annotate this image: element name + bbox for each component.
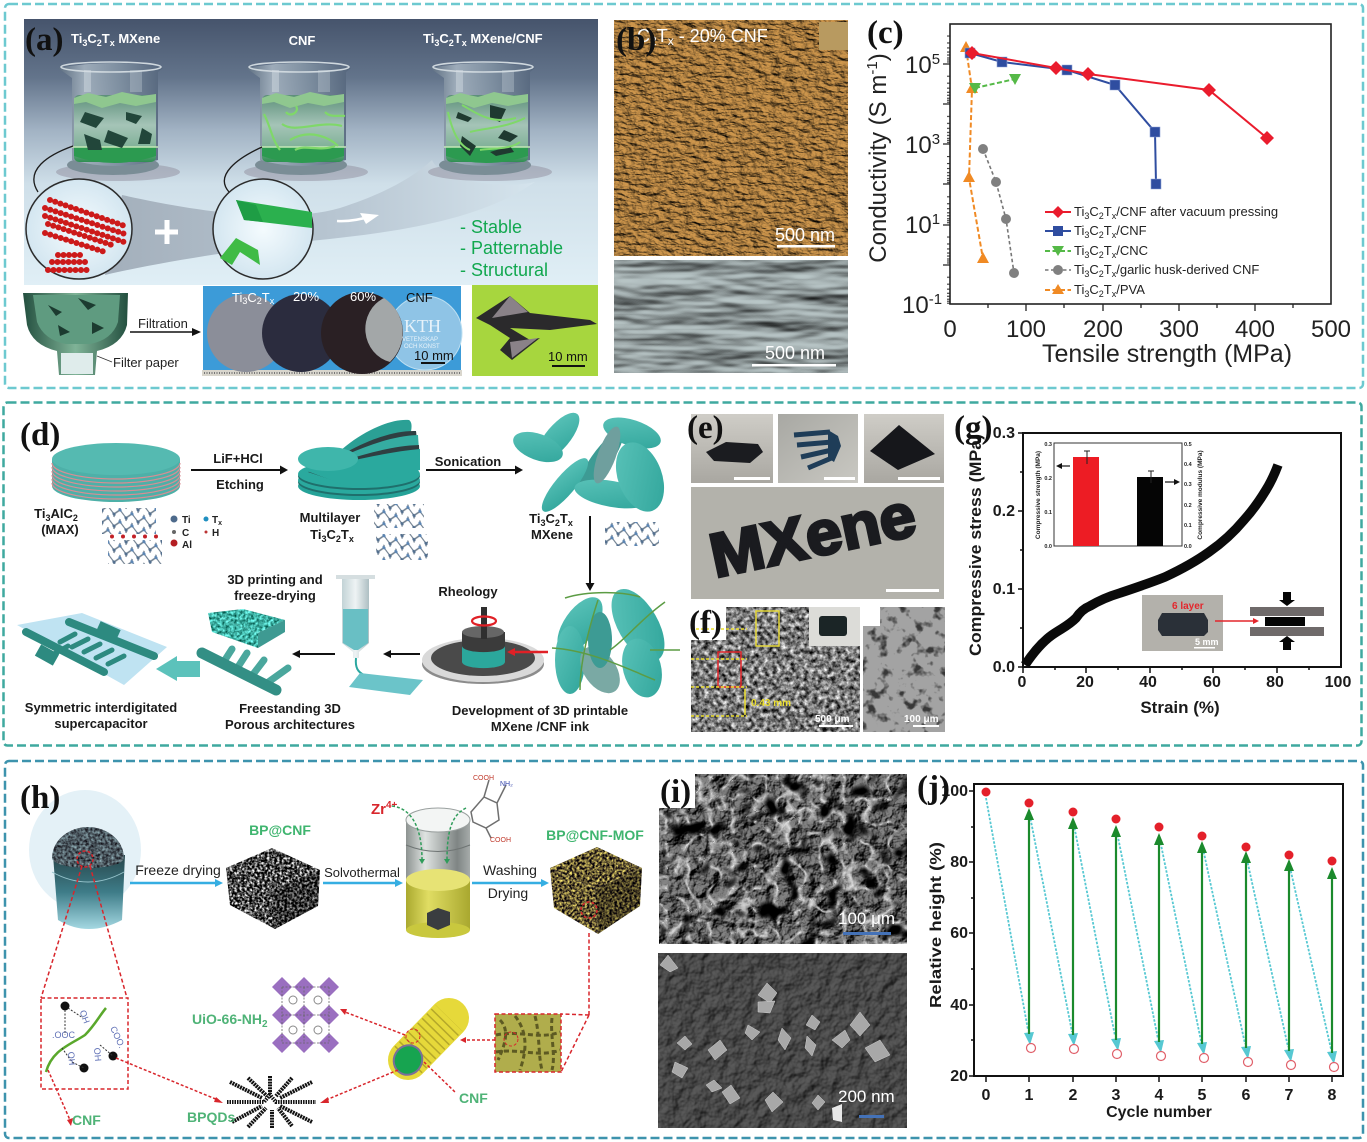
3D printing caption [227, 572, 323, 603]
label i: (i) [660, 774, 691, 810]
MAX and multilayer captions [34, 506, 573, 544]
series: blue CNF [965, 48, 1161, 189]
micrograph (i): MOF crystals: 200 nm [838, 1087, 895, 1106]
photo: folded film: 10 mm [548, 349, 588, 364]
inset bar chart: 0.4 [1184, 462, 1193, 468]
legend: /garlic husk-derived CNF [1116, 262, 1259, 277]
washing drying arrow: Drying [488, 885, 528, 901]
beaker titles: MXene/CNF [467, 31, 543, 46]
stress curve [1025, 465, 1278, 665]
MOF crystal structure [272, 977, 339, 1053]
beaker: CNF [244, 62, 368, 181]
inset photo: 6 layer sample: 6 layer [1172, 601, 1204, 612]
beaker titles: x [110, 38, 115, 48]
micrograph (i): porous network: 100 μm [838, 909, 895, 928]
etching arrow: LiF+HCl [213, 451, 263, 466]
legend: Ti [1074, 282, 1084, 297]
micrograph (b): AFM image: C [637, 26, 650, 46]
UiO label: UiO-66-NH [192, 1011, 262, 1027]
y tick labels: 3 [932, 131, 940, 148]
photo: film series: 60% [350, 289, 376, 304]
Zr ion label and green arrows: 4+ [386, 800, 398, 811]
tick labels: 20 [950, 1068, 968, 1085]
legend: C [1089, 223, 1099, 238]
micrograph (b): AFM image: x [668, 34, 674, 48]
sonication arrow [426, 454, 523, 474]
reaction vessel [406, 808, 470, 938]
beaker titles: 2 [97, 38, 102, 48]
green recovery arrows [1024, 808, 1337, 1053]
photo: film series [202, 286, 462, 376]
legend: 3 [1084, 269, 1089, 279]
tick labels: 2 [1069, 1087, 1078, 1104]
tick labels: 100 [941, 783, 968, 800]
inset bar chart: 0.0 [1044, 544, 1052, 550]
legend: 2 [1099, 269, 1104, 279]
label g: (g) [954, 410, 992, 446]
micrograph (b): AFM image: 500 nm [775, 225, 835, 245]
MAX and multilayer captions: 3 [540, 518, 545, 528]
BP@CNF cube: BP@CNF [249, 822, 311, 838]
tick labels: 1 [1025, 1087, 1034, 1104]
interdigitated supercapacitor [17, 613, 167, 685]
MAX and multilayer captions: Ti [310, 527, 321, 542]
micrograph (b): AFM image: - 20% CNF [674, 26, 768, 46]
photos (e): printed objects: MXene [704, 481, 922, 591]
down arrow [586, 516, 594, 591]
legend: C [1089, 262, 1099, 277]
red dashed zoom lines [41, 851, 128, 1089]
legend: x [1112, 250, 1117, 260]
photo: film series: 10 mm [414, 348, 454, 363]
linker molecule: NH₂ [500, 781, 513, 788]
beaker titles: CNF [289, 33, 315, 48]
Zr ion label and green arrows [371, 800, 466, 864]
3D printing caption: freeze-drying [234, 588, 316, 603]
BP@CNF cube [226, 822, 320, 929]
tick labels: 0.2 [993, 503, 1015, 520]
properties list: - Stable [460, 217, 522, 237]
MAX and multilayer captions: 2 [73, 513, 78, 523]
legend: T [1104, 223, 1112, 238]
tick labels: 100 [1325, 674, 1351, 691]
beaker titles: 3 [82, 38, 87, 48]
MAX and multilayer captions: (MAX) [41, 522, 79, 537]
axis titles: Cycle number [1106, 1104, 1212, 1121]
bottom captions: MXene /CNF ink [491, 719, 590, 734]
legend: C [1089, 243, 1099, 258]
green captions [72, 1090, 488, 1128]
x tick labels: 500 [1311, 316, 1351, 343]
filtration label and arrow [97, 316, 201, 370]
chart (g): compressive stress-strain [966, 425, 1351, 717]
properties list: - Patternable [460, 238, 563, 258]
beaker titles: 3 [434, 38, 439, 48]
legend: T [1104, 282, 1112, 297]
linker molecule: COOH [473, 775, 494, 782]
atom legend: C [182, 528, 189, 539]
micrograph (b): AFM image: 2 [650, 34, 657, 48]
legend: Ti [1074, 262, 1084, 277]
tick labels: 80 [1266, 674, 1284, 691]
red filled points [982, 788, 1336, 866]
properties list: - Structural [460, 260, 548, 280]
photo: film series: KTH [404, 316, 441, 336]
MAX and multilayer captions: Multilayer [300, 510, 360, 525]
y tick labels: 1 [932, 211, 940, 228]
atom legend: T [212, 515, 218, 526]
label h: (h) [20, 780, 60, 816]
micrograph (b): layered SEM cross section [614, 260, 848, 373]
big teal arrow [156, 656, 200, 681]
swoosh band [105, 160, 535, 275]
legend: 3 [1084, 211, 1089, 221]
micrograph (f): printed lattice SEM [689, 605, 860, 732]
legend: 2 [1099, 250, 1104, 260]
tick labels: 20 [1076, 674, 1094, 691]
CNF molecular detail: OH [92, 1047, 103, 1062]
beaker titles: x [462, 38, 467, 48]
legend: x [1112, 211, 1117, 221]
legend: Ti [1074, 223, 1084, 238]
UiO label: 2 [262, 1019, 268, 1030]
plus sign [155, 220, 178, 244]
legend: T [1104, 204, 1112, 219]
inset bar chart: 0.1 [1044, 510, 1052, 516]
tick labels: 0.1 [993, 581, 1015, 598]
photo: film series: 20% [293, 289, 319, 304]
tick labels: 40 [950, 997, 968, 1014]
tick labels: 0.0 [993, 659, 1015, 676]
properties list [460, 217, 563, 280]
tick labels: 80 [950, 854, 968, 871]
micrograph (i): MOF crystals [658, 953, 907, 1128]
photo: film series: CNF [406, 290, 433, 305]
legend: 3 [1084, 250, 1089, 260]
photo: film series: OCH KONST [404, 344, 440, 350]
schematic (h): aerogel synthesis [29, 775, 644, 1128]
CNF molecular detail: .OOC [52, 1030, 76, 1040]
circle: MXene crystal zoom [26, 179, 132, 279]
y tick labels: 5 [932, 51, 940, 68]
bottom captions: Symmetric interdigitated [25, 700, 177, 715]
filtration label and arrow: Filter paper [113, 355, 179, 370]
solvothermal arrow [323, 865, 403, 887]
MAX and multilayer captions: T [341, 527, 349, 542]
photo: film series: 3 [242, 296, 247, 306]
tick labels: 3 [1112, 1087, 1121, 1104]
legend: T [1104, 243, 1112, 258]
x tick labels: 300 [1159, 316, 1199, 343]
washing drying arrow [472, 862, 549, 901]
syringe and printed strip [336, 575, 423, 695]
MAX and multilayer captions: x [349, 534, 354, 544]
beaker: MXene [56, 62, 180, 181]
y tick labels: -1 [929, 291, 942, 308]
beaker: MXene/CNF [428, 62, 552, 181]
micrograph (b): layered SEM cross section: 500 nm [765, 343, 825, 363]
washing drying arrow: Washing [483, 862, 537, 878]
legend: C [1089, 204, 1099, 219]
series: green CNC [969, 74, 1021, 94]
legend: /PVA [1116, 282, 1145, 297]
MAX and multilayer captions: AlC [50, 506, 73, 521]
atom legend: Ti [182, 515, 191, 526]
porous block [208, 609, 285, 648]
solvothermal arrow: Solvothermal [324, 865, 400, 880]
legend: C [1089, 282, 1099, 297]
tick labels: 5 [1198, 1087, 1207, 1104]
CNF molecular detail: HO [78, 1009, 92, 1025]
micrograph (b): AFM image: T [657, 26, 668, 46]
legend: 2 [1099, 230, 1104, 240]
pore close-up square [495, 933, 589, 1072]
hydrogel beaker [29, 790, 141, 929]
photo: film series: 2 [257, 296, 262, 306]
inset bar chart: 0.1 [1184, 523, 1192, 529]
CNF molecular detail: OH [66, 1051, 77, 1066]
photo: film series: VETENSKAP [402, 337, 438, 343]
inset bar chart: 0.2 [1184, 503, 1192, 509]
tick labels: 6 [1242, 1087, 1251, 1104]
MAX and multilayer captions: Ti [34, 506, 45, 521]
filtration funnel [23, 293, 128, 375]
legend: x [1112, 269, 1117, 279]
x axis title: Tensile strength (MPa) [1042, 340, 1292, 368]
bottom captions: Freestanding 3D [239, 701, 341, 716]
legend: Ti [1074, 204, 1084, 219]
inset bar chart: Compressive strength (MPa) [1035, 451, 1042, 539]
beaker titles: C [87, 31, 97, 46]
inset bar chart: 0.3 [1184, 482, 1192, 488]
legend: Ti [1074, 243, 1084, 258]
MAX and multilayer captions: 2 [336, 534, 341, 544]
series: red vacuum pressed [965, 46, 1274, 145]
bottom captions: Development of 3D printable [452, 703, 628, 718]
linker molecule [471, 775, 513, 844]
micrograph (f): pore close-up [862, 606, 945, 732]
MAX disc [52, 443, 180, 502]
freeze drying arrow [130, 862, 223, 887]
micrograph (i): porous network [659, 774, 907, 944]
tick labels: 4 [1155, 1087, 1164, 1104]
label e: (e) [687, 410, 724, 446]
tick labels: 7 [1285, 1087, 1294, 1104]
legend: /CNC [1116, 243, 1148, 258]
MAX and multilayer captions: 3 [321, 534, 326, 544]
tick labels [941, 783, 1337, 1104]
beaker titles: MXene [115, 31, 160, 46]
legend: /CNF after vacuum pressing [1116, 204, 1278, 219]
label b: (b) [616, 22, 656, 58]
multilayer stack [298, 420, 420, 500]
CNF molecular detail: COO. [108, 1025, 127, 1050]
inset bar chart: 0.0 [1184, 544, 1192, 550]
bottom captions: Porous architectures [225, 717, 355, 732]
micrograph (f): printed lattice SEM: 0.43 mm [751, 698, 791, 709]
circle: CNF fibre zoom [213, 179, 313, 279]
tick labels: 0.3 [993, 425, 1015, 442]
BP@CNF-MOF cube [546, 827, 644, 934]
etching arrow [191, 451, 288, 492]
label j: (j) [917, 770, 950, 806]
MAX and multilayer captions: C [326, 527, 336, 542]
bottom captions [25, 700, 628, 734]
coated fibre [388, 1018, 449, 1080]
y tick labels: 10 [905, 212, 932, 239]
photo: film series: Ti [232, 290, 242, 305]
tick labels: 0 [982, 1087, 991, 1104]
schematic (d): ink synthesis and printing [17, 406, 680, 734]
inset photo: 6 layer sample [1142, 595, 1223, 651]
legend: x [1112, 230, 1117, 240]
red input arrow [507, 648, 548, 656]
micrograph (f): printed lattice SEM: 500 μm [815, 714, 850, 725]
BPQDs burst [227, 1076, 316, 1128]
BP@CNF-MOF cube: BP@CNF-MOF [546, 827, 644, 843]
axis titles: Strain (%) [1140, 698, 1220, 717]
CNF molecular detail [46, 1002, 127, 1072]
tick labels [993, 425, 1351, 691]
label a: (a) [25, 22, 63, 58]
photo: film series: C [247, 290, 257, 305]
inset bar chart: 0.3 [1044, 442, 1052, 448]
beaker titles: T [102, 31, 110, 46]
legend: x [1112, 289, 1117, 299]
callout curves [34, 146, 262, 192]
beaker titles: Ti [71, 31, 82, 46]
green captions: BPQDs [187, 1109, 235, 1125]
MAX and multilayer captions: 3 [45, 513, 50, 523]
chart (g): compressive stress-strain: Compressive stress (MPa) [966, 434, 985, 656]
freestanding comb [202, 649, 288, 690]
y axis title: -1 [864, 61, 881, 75]
photos (e): printed objects [691, 414, 944, 599]
x tick labels: 200 [1083, 316, 1123, 343]
chart (c): conductivity vs tensile strength [864, 24, 1351, 368]
red dashed pointers [48, 1012, 495, 1120]
atom legend: x [218, 520, 222, 527]
tick labels: 8 [1328, 1087, 1337, 1104]
x tick labels [943, 316, 1351, 343]
photo: film series: x [270, 296, 275, 306]
ink flakes with CNF [549, 580, 680, 702]
legend: 3 [1084, 230, 1089, 240]
freeze drying arrow: Freeze drying [135, 862, 221, 878]
MAX and multilayer captions: C [545, 511, 555, 526]
inset bar chart: Compressive modulus (MPa) [1197, 450, 1204, 540]
green captions: CNF [72, 1112, 101, 1128]
red arrow heads [67, 1009, 466, 1126]
legend: 2 [1099, 289, 1104, 299]
series: grey garlic husk CNF [978, 144, 1019, 278]
rheometer: Rheology [438, 584, 498, 599]
3D printing caption: 3D printing and [227, 572, 323, 587]
dispersed flakes [509, 406, 673, 518]
label c: (c) [867, 15, 904, 51]
legend [1045, 204, 1278, 299]
micrograph (b): AFM image [614, 20, 848, 256]
series: orange PVA [960, 41, 989, 263]
tick labels: 60 [950, 925, 968, 942]
y tick labels: 10 [902, 292, 929, 319]
linker molecule: COOH [490, 837, 511, 844]
rheometer [422, 584, 544, 684]
beaker titles: Ti [423, 31, 434, 46]
legend: 3 [1084, 289, 1089, 299]
panel: BP@CNF-MOF aerogel (h-j) [5, 761, 1363, 1138]
MAX and multilayer captions: 2 [555, 518, 560, 528]
chart (j): relative height cycling: Relative height (%) [928, 842, 945, 1008]
bottom captions: supercapacitor [54, 716, 148, 731]
y axis title: Conductivity (S m [865, 75, 892, 263]
label f: (f) [689, 605, 722, 641]
white arrow [337, 213, 379, 224]
MAX and multilayer captions: Ti [529, 511, 540, 526]
photo: folded film [472, 285, 598, 376]
legend: /CNF [1116, 223, 1147, 238]
filtration label and arrow: Filtration [138, 316, 188, 331]
y axis title: ) [865, 53, 892, 61]
MAX and multilayer captions: MXene [531, 527, 573, 542]
green captions: CNF [459, 1090, 488, 1106]
atom legend: Al [182, 540, 192, 551]
atom legend: H [212, 528, 219, 539]
panel: 3D printed MXene ink (d-g) [4, 402, 1362, 746]
beaker titles: T [454, 31, 462, 46]
sonication arrow: Sonication [435, 454, 501, 469]
x tick labels: 400 [1235, 316, 1275, 343]
illustration (a): beakers and composite mixing [24, 19, 598, 285]
etching arrow: Etching [216, 477, 264, 492]
x tick labels: 100 [1006, 316, 1046, 343]
panel: MXene/CNF films (a-c) [5, 4, 1363, 388]
tick labels: 40 [1139, 674, 1157, 691]
beaker titles: 2 [449, 38, 454, 48]
y tick labels: 10 [905, 52, 932, 79]
photo: film series: T [262, 290, 270, 305]
cyan compression arrows [986, 798, 1337, 1064]
micrograph (f): pore close-up: 100 μm [904, 714, 939, 725]
tick labels: 0 [1018, 674, 1027, 691]
process arrows [292, 650, 420, 658]
label d: (d) [20, 417, 60, 453]
Zr ion label and green arrows: Zr [371, 801, 386, 818]
inset bar chart [1035, 442, 1204, 550]
legend: 2 [1099, 211, 1104, 221]
atom legend [170, 515, 222, 551]
MAX and multilayer captions: T [560, 511, 568, 526]
beaker titles: C [439, 31, 449, 46]
x tick labels: 0 [943, 316, 957, 343]
compression diagram [1215, 592, 1324, 650]
inset bar chart: 0.2 [1044, 476, 1052, 482]
hollow points [1026, 1044, 1338, 1072]
chart (j): relative height cycling [928, 783, 1343, 1121]
inset bar chart: 0.5 [1184, 442, 1192, 448]
y tick labels [902, 51, 942, 319]
beaker titles [71, 31, 543, 48]
legend: T [1104, 262, 1112, 277]
atomic lattices [102, 504, 659, 564]
y tick labels: 10 [905, 132, 932, 159]
tick labels: 60 [1203, 674, 1221, 691]
inset photo: 6 layer sample: 5 mm [1195, 637, 1219, 647]
MAX and multilayer captions: x [568, 518, 573, 528]
